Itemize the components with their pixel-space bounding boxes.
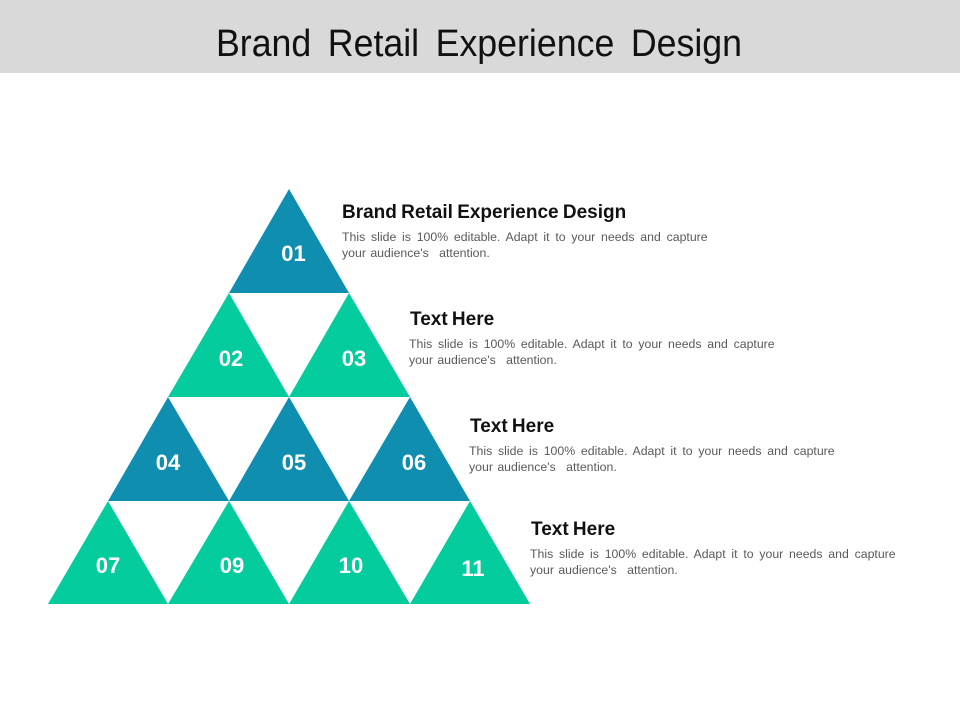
triangle 03	[289, 293, 410, 397]
triangle 04	[108, 397, 229, 501]
text block 3	[469, 416, 835, 474]
triangle 01: 01	[281, 241, 306, 266]
triangle 11: 11	[461, 556, 485, 581]
triangle 07: 07	[96, 553, 120, 578]
heading 2: Text Here	[410, 308, 494, 330]
triangle 01	[229, 189, 349, 293]
text block 4	[530, 518, 896, 577]
triangle 10: 10	[339, 553, 363, 578]
triangle 06	[349, 397, 470, 501]
triangle 02	[168, 293, 289, 397]
triangle 05	[229, 397, 349, 501]
triangle 07	[48, 501, 168, 604]
text block 1	[342, 202, 708, 260]
triangle 11	[410, 501, 530, 604]
triangle 02: 02	[219, 346, 243, 371]
triangle 03: 03	[342, 346, 366, 371]
description 3: your audience's attention.	[469, 460, 617, 474]
triangle 06: 06	[402, 450, 426, 475]
description 2: This slide is 100% editable. Adapt it to your needs and capture	[409, 336, 775, 350]
description 1: This slide is 100% editable. Adapt it to your needs and capture	[342, 230, 708, 244]
triangle 04: 04	[156, 450, 181, 475]
title: Brand Retail Experience Design	[216, 23, 742, 65]
description 4: This slide is 100% editable. Adapt it to your needs and capture	[530, 546, 896, 560]
description 4	[530, 546, 896, 577]
description 1	[342, 230, 708, 260]
triangle 10	[289, 501, 410, 604]
description 2: your audience's attention.	[409, 353, 557, 367]
description 3	[469, 444, 835, 474]
description 4: your audience's attention.	[530, 563, 678, 577]
description 3: This slide is 100% editable. Adapt it to your needs and capture	[469, 444, 835, 458]
description 1: your audience's attention.	[342, 246, 490, 260]
heading 4: Text Here	[531, 518, 615, 540]
triangle 09	[168, 501, 289, 604]
triangle 05: 05	[282, 450, 306, 475]
description 2	[409, 336, 775, 367]
heading 1: Brand Retail Experience Design	[342, 202, 626, 222]
text block 2	[409, 308, 775, 367]
heading 3: Text Here	[470, 416, 554, 436]
triangle 09: 09	[220, 553, 244, 578]
title banner	[0, 0, 960, 73]
